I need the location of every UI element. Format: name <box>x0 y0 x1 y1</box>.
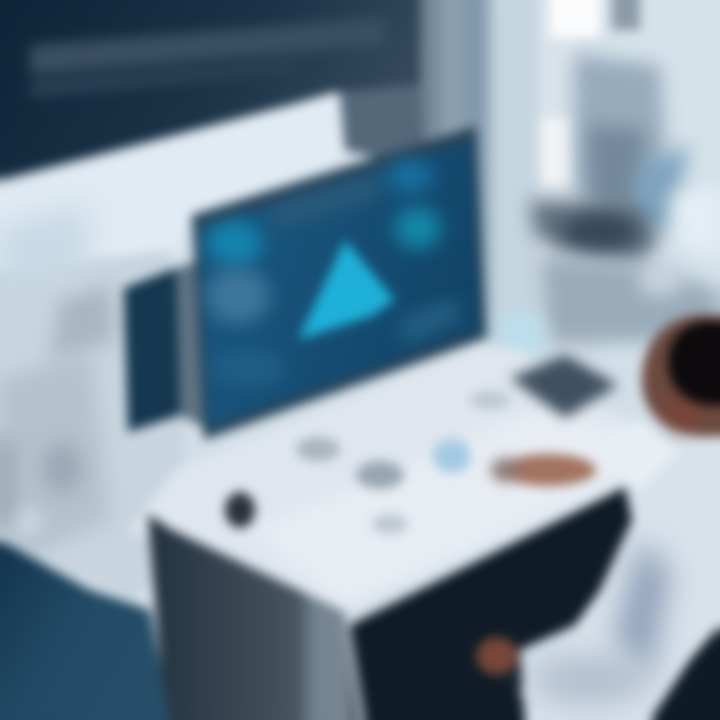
window and shelves at top right <box>415 0 720 360</box>
monitor stand <box>176 260 208 430</box>
floor at bottom left <box>0 540 170 720</box>
hand on desk <box>500 454 596 486</box>
chart: triangle on screen <box>298 240 395 340</box>
person <box>476 315 720 720</box>
tablet on desk <box>510 355 618 418</box>
hair <box>668 321 720 405</box>
secondary monitor <box>124 268 180 432</box>
dark wall panel at top left <box>0 0 425 180</box>
screen widgets <box>206 159 460 386</box>
icon: mouse <box>225 492 255 528</box>
lower hand <box>476 637 518 675</box>
sleeve on desk <box>590 420 680 490</box>
papers and clutter on the left <box>0 205 185 600</box>
white wall board <box>0 92 345 330</box>
dark chair and shadow <box>350 487 720 720</box>
face and neck <box>642 315 720 437</box>
desk front and leg <box>148 514 360 720</box>
main monitor <box>192 126 486 440</box>
desk items <box>225 391 510 534</box>
desk top <box>130 345 640 612</box>
shirt <box>520 430 720 720</box>
